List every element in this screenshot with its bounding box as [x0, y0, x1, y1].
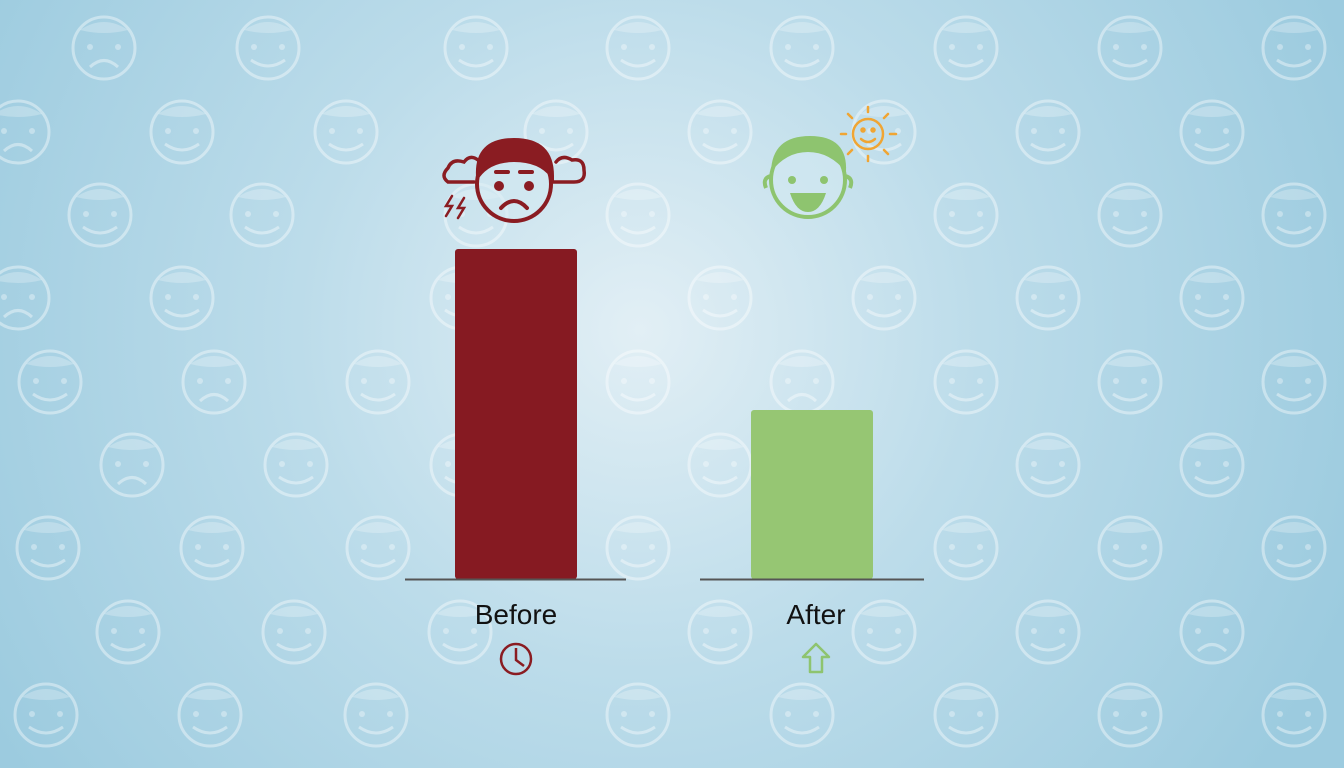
- label: before: Before: [475, 599, 557, 630]
- icon: up arrow: [803, 644, 829, 672]
- icon: stressed face with storm clouds: [444, 140, 584, 221]
- icon: happy face with sun: [765, 107, 896, 217]
- label: after: After: [786, 599, 846, 630]
- icon: clock: [501, 644, 531, 674]
- bar: after: [751, 410, 873, 579]
- bar: before: [455, 249, 577, 579]
